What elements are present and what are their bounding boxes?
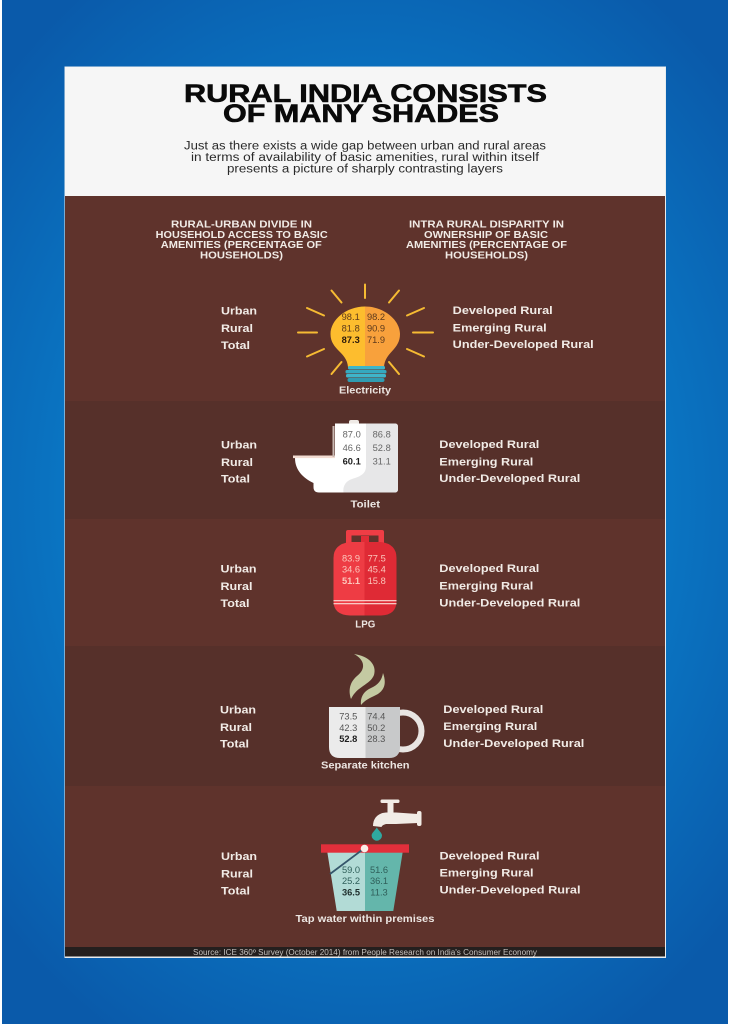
values: kitchen: 73.5 <box>339 712 357 722</box>
labels: developed emerging under-developed: Under-Developed Rural <box>440 884 580 896</box>
icon: bucket <box>321 844 409 911</box>
column heading: intra rural disparity <box>406 218 568 262</box>
labels: developed emerging under-developed <box>439 563 580 609</box>
labels: developed emerging under-developed <box>443 704 584 750</box>
labels: developed emerging under-developed: Developed Rural <box>439 439 539 451</box>
column heading: rural-urban divide: RURAL-URBAN DIVIDE IN <box>171 218 312 230</box>
values: kitchen: 28.3 <box>367 734 385 744</box>
labels: developed emerging under-developed: Emerging Rural <box>440 868 534 880</box>
labels: urban rural total <box>221 306 257 352</box>
labels: urban rural total: Urban <box>221 306 257 318</box>
icon: mug <box>329 707 422 758</box>
labels: developed emerging under-developed: Emerging Rural <box>439 456 533 468</box>
labels: developed emerging under-developed: Emerging Rural <box>443 721 537 733</box>
source bar <box>65 947 665 957</box>
row: separate kitchen <box>220 654 584 772</box>
caption: toilet: Toilet <box>350 499 381 511</box>
values: lpg: 45.4 <box>368 564 386 574</box>
caption: lpg: LPG <box>355 618 375 630</box>
labels: developed emerging under-developed: Developed Rural <box>439 563 539 575</box>
column heading: rural-urban divide: HOUSEHOLD ACCESS TO BASIC <box>156 229 328 241</box>
band: kitchen row <box>65 646 665 786</box>
labels: developed emerging under-developed: Emerging Rural <box>453 322 547 334</box>
labels: urban rural total <box>220 564 257 610</box>
values: tap water: 36.5 <box>342 888 360 898</box>
labels: urban rural total: Total <box>221 340 250 352</box>
values: electricity: 87.3 <box>342 335 360 345</box>
values: toilet: 52.8 <box>373 443 391 453</box>
icon: light bulb <box>298 284 433 382</box>
values: lpg: 15.8 <box>368 576 386 586</box>
source bar: Source: ICE 360º Survey (October 2014) from People Research on India's Consumer Economy <box>193 948 537 957</box>
labels: developed emerging under-developed: Developed Rural <box>443 704 543 716</box>
icon: tap <box>373 800 422 827</box>
panel: brown body <box>65 196 665 947</box>
column heading: intra rural disparity: AMENITIES (PERCENTAGE OF <box>406 239 568 251</box>
values: kitchen: 74.4 <box>367 712 385 722</box>
labels: urban rural total: Urban <box>221 851 257 863</box>
labels: developed emerging under-developed: Under-Developed Rural <box>453 339 594 351</box>
values: electricity: 98.1 <box>342 312 360 322</box>
labels: urban rural total <box>221 851 257 897</box>
values: tap water: 11.3 <box>370 888 388 898</box>
column heading: rural-urban divide: HOUSEHOLDS) <box>200 250 283 262</box>
column heading: intra rural disparity: OWNERSHIP OF BASIC <box>424 229 548 241</box>
labels: urban rural total: Total <box>221 474 250 486</box>
labels: developed emerging under-developed: Under-Developed Rural <box>443 738 584 750</box>
values: lpg <box>342 554 386 586</box>
values: toilet: 31.1 <box>373 456 391 466</box>
row: electricity <box>221 284 594 397</box>
caption: electricity: Electricity <box>339 385 391 397</box>
caption: separate kitchen: Separate kitchen <box>321 760 410 772</box>
values: electricity <box>342 312 385 345</box>
values: lpg: 51.1 <box>342 576 360 586</box>
title: OF MANY SHADES <box>223 100 499 128</box>
labels: urban rural total: Rural <box>220 581 252 593</box>
icon: water drop <box>372 828 382 841</box>
subtitle: Just as there exists a wide gap between urban and rural areas <box>184 140 546 152</box>
labels: urban rural total <box>221 440 257 486</box>
panel: infographic card <box>64 66 666 958</box>
panel: header <box>65 67 665 196</box>
values: tap water: 25.2 <box>342 876 360 886</box>
row: toilet <box>221 420 580 511</box>
labels: urban rural total: Urban <box>220 564 257 576</box>
values: lpg: 77.5 <box>368 554 386 564</box>
column heading: rural-urban divide <box>156 218 328 262</box>
values: electricity: 81.8 <box>342 324 360 334</box>
values: toilet: 86.8 <box>373 430 391 440</box>
labels: developed emerging under-developed <box>440 850 580 896</box>
labels: developed emerging under-developed: Under-Developed Rural <box>439 473 580 485</box>
values: toilet: 60.1 <box>343 456 361 466</box>
column heading: rural-urban divide: AMENITIES (PERCENTAGE OF <box>161 239 322 251</box>
icon: gas cylinder <box>334 530 396 616</box>
values: lpg: 34.6 <box>342 564 360 574</box>
icon: toilet <box>293 420 398 492</box>
values: kitchen: 42.3 <box>339 723 357 733</box>
caption: tap water: Tap water within premises <box>296 913 435 925</box>
labels: developed emerging under-developed <box>439 439 580 485</box>
labels: urban rural total: Urban <box>220 704 256 716</box>
values: kitchen: 50.2 <box>367 723 385 733</box>
column heading: intra rural disparity: HOUSEHOLDS) <box>445 250 528 262</box>
column heading: intra rural disparity: INTRA RURAL DISPARITY IN <box>409 218 564 230</box>
values: electricity: 71.9 <box>367 335 385 345</box>
labels: developed emerging under-developed: Under-Developed Rural <box>439 597 580 609</box>
subtitle: presents a picture of sharply contrasting layers <box>227 164 503 176</box>
values: toilet <box>343 430 391 466</box>
labels: urban rural total: Total <box>220 598 250 610</box>
labels: urban rural total: Rural <box>221 868 253 880</box>
icon: steam <box>350 654 385 705</box>
labels: urban rural total <box>220 704 256 750</box>
labels: developed emerging under-developed: Developed Rural <box>453 305 553 317</box>
labels: urban rural total: Urban <box>221 440 257 452</box>
title: RURAL INDIA CONSISTS <box>184 80 547 108</box>
labels: urban rural total: Rural <box>220 722 252 734</box>
row: tap water <box>221 800 580 925</box>
subtitle: in terms of availability of basic amenities, rural within itself <box>191 152 540 164</box>
band: toilet row <box>65 401 665 519</box>
labels: developed emerging under-developed: Developed Rural <box>440 850 540 862</box>
labels: developed emerging under-developed <box>453 305 594 351</box>
values: tap water: 51.6 <box>370 865 388 875</box>
values: tap water: 59.0 <box>342 865 360 875</box>
values: kitchen: 52.8 <box>339 734 357 744</box>
labels: urban rural total: Rural <box>221 323 253 335</box>
values: tap water: 36.1 <box>370 876 388 886</box>
values: tap water <box>342 865 388 898</box>
values: electricity: 90.9 <box>367 324 385 334</box>
values: kitchen <box>339 712 385 744</box>
values: electricity: 98.2 <box>367 312 385 322</box>
subtitle <box>184 140 546 176</box>
values: toilet: 46.6 <box>343 443 361 453</box>
values: lpg: 83.9 <box>342 554 360 564</box>
title <box>184 80 547 128</box>
labels: urban rural total: Total <box>220 738 249 750</box>
row: lpg <box>220 530 580 630</box>
labels: developed emerging under-developed: Emerging Rural <box>439 580 533 592</box>
labels: urban rural total: Total <box>221 885 250 897</box>
labels: urban rural total: Rural <box>221 457 253 469</box>
values: toilet: 87.0 <box>343 430 361 440</box>
